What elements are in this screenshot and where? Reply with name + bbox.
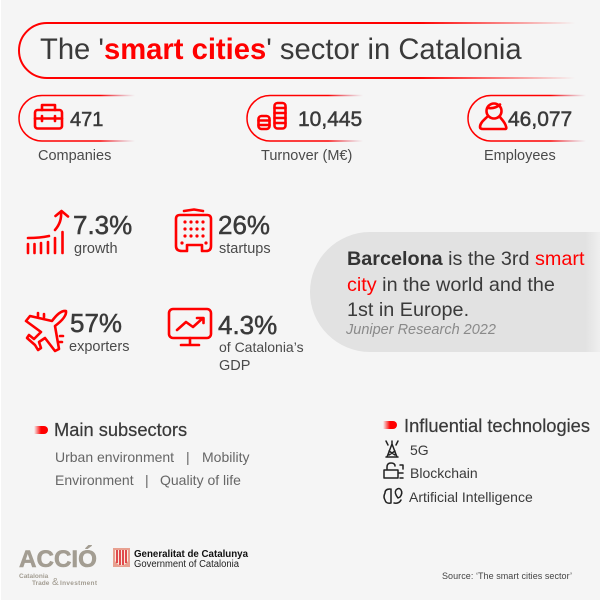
- icon: airplane: [26, 311, 66, 351]
- icon: 5G antenna: [386, 441, 398, 457]
- title: The 'smart cities' sector in Catalonia: [40, 34, 522, 66]
- stat: turnover: [247, 96, 363, 164]
- logo: Generalitat de Catalunya: [113, 548, 248, 570]
- icon: building: [176, 210, 211, 251]
- metric: exporters: 57%: [70, 308, 122, 338]
- metric: growth: [28, 210, 132, 257]
- source note: Source: ‘The smart cities sector’: [442, 571, 572, 581]
- stat: companies: [19, 96, 135, 164]
- icon: blockchain lock: [384, 463, 403, 478]
- stat: employees: Employees: [484, 148, 556, 164]
- panel: influential technologies: [383, 415, 590, 505]
- bullet: [34, 426, 48, 434]
- icon: person: [480, 104, 506, 129]
- logo: ACCIÓ: ACCIÓ: [19, 545, 97, 573]
- metric: startups: startups: [219, 241, 271, 257]
- logo: ACCIÓ: [19, 545, 98, 588]
- logo: ACCIÓ: Catalonia: [19, 573, 49, 580]
- logo: Generalitat de Catalunya: Generalitat de Catalunya: [134, 549, 248, 560]
- logo: ACCIÓ: Trade: [32, 580, 50, 587]
- metric: exporters: exporters: [69, 339, 129, 355]
- panel: main subsectors: |: [186, 449, 190, 465]
- panel: main subsectors: Environment: [55, 472, 134, 488]
- callout: Barcelona: Juniper Research 2022: [345, 322, 496, 338]
- callout: Barcelona: Barcelona is the 3rd smart: [347, 248, 585, 270]
- stat: companies: 471: [70, 109, 103, 131]
- callout: Barcelona: city in the world and the: [347, 274, 555, 296]
- title: [19, 23, 575, 78]
- icon: briefcase: [35, 105, 62, 128]
- metric: growth: 7.3%: [73, 210, 132, 240]
- stat: turnover: 10,445: [298, 108, 362, 131]
- stat: employees: [468, 96, 586, 164]
- bullet: [383, 421, 397, 429]
- panel: main subsectors: Main subsectors: [54, 419, 187, 440]
- panel: influential technologies: Artificial Intelligence: [409, 489, 533, 505]
- panel: main subsectors: Mobility: [202, 449, 249, 465]
- icon: monitor with trend: [169, 309, 211, 345]
- icon: coins: [258, 103, 286, 129]
- metric: growth: growth: [74, 241, 118, 257]
- stat: employees: 46,077: [508, 108, 572, 131]
- metric: exporters: [26, 308, 129, 355]
- panel: influential technologies: 5G: [410, 442, 429, 458]
- logo: Generalitat de Catalunya: Government of Catalonia: [134, 559, 239, 570]
- icon: rising bar chart: [28, 211, 68, 253]
- panel: main subsectors: Quality of life: [160, 472, 241, 488]
- metric: GDP: [169, 309, 304, 374]
- metric: startups: [176, 210, 271, 257]
- stat: turnover: Turnover (M€): [261, 148, 352, 164]
- callout: Barcelona: [310, 232, 600, 352]
- panel: influential technologies: Influential technologies: [404, 415, 590, 436]
- stat: companies: Companies: [38, 148, 111, 164]
- logo: ACCIÓ: Investment: [60, 580, 98, 587]
- metric: GDP: GDP: [219, 358, 250, 374]
- panel: main subsectors: Urban environment: [55, 449, 174, 465]
- icon: AI brain: [384, 488, 402, 503]
- panel: influential technologies: Blockchain: [410, 465, 478, 481]
- metric: startups: 26%: [218, 210, 270, 240]
- logo: ACCIÓ: &: [52, 577, 59, 588]
- callout: Barcelona: 1st in Europe.: [347, 299, 469, 321]
- panel: main subsectors: [34, 419, 249, 488]
- metric: GDP: 4.3%: [218, 310, 277, 340]
- metric: GDP: of Catalonia’s: [219, 339, 304, 355]
- panel: main subsectors: |: [145, 472, 149, 488]
